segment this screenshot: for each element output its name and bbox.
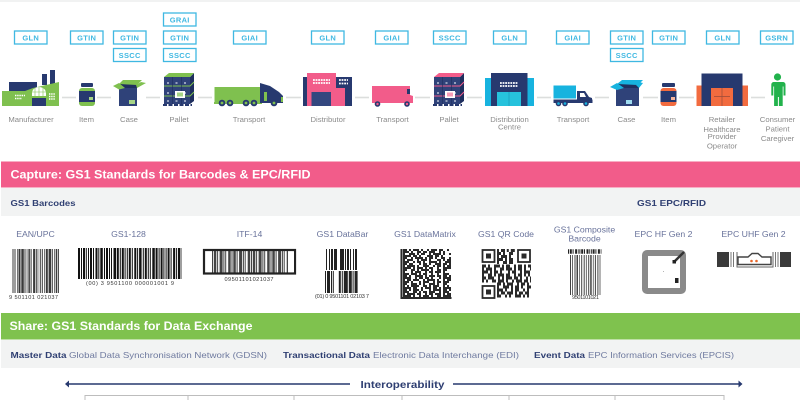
icon: manufacturer factory [2, 70, 59, 106]
identifier tags row: GTIN [617, 34, 636, 42]
icon: case green [113, 80, 146, 106]
icon: EPC UHF RFID tag [717, 252, 791, 267]
stage labels: Item [79, 115, 94, 124]
icon: distribution centre [485, 73, 534, 106]
barcode type labels: GS1-128 [111, 229, 146, 239]
identifier tags row: GIAI [241, 34, 258, 42]
barcode type labels: GS1 DataMatrix [394, 229, 457, 239]
stage labels: Centre [498, 122, 521, 132]
stage labels: Distributor [310, 115, 346, 124]
stage labels: Transport [233, 115, 266, 124]
identifier tags row: GTIN [120, 34, 139, 42]
panel: data standards row [1, 340, 800, 368]
barcode: ITF-14 [204, 250, 295, 283]
barcode: GS1 DataMatrix [402, 249, 452, 299]
icon: consumer person [771, 73, 786, 106]
icon: item jar orange [660, 83, 676, 106]
supply chain connectors [62, 96, 765, 98]
stage labels: Patient [766, 124, 790, 134]
identifier tags row: GRAI [170, 16, 190, 24]
stage labels: Transport [376, 115, 410, 124]
stage labels: Pallet [439, 115, 459, 124]
interoperability arrow [65, 380, 742, 391]
panel: capture heading band: Capture: GS1 Standards for Barcodes & EPC/RFID [10, 168, 311, 182]
icon: pallet pink [433, 73, 464, 105]
icon: pallet green [163, 73, 194, 105]
panel: data standards row: Electronic Data Interchange (EDI) [373, 350, 519, 360]
identifier tags row: GIAI [564, 34, 581, 42]
barcode type labels: GS1 QR Code [478, 229, 534, 239]
identifier tags row: GLN [501, 34, 518, 42]
icon: distributor building [303, 73, 352, 106]
identifier tags row: SSCC [169, 51, 191, 60]
identifier tags row: GTIN [77, 34, 96, 42]
barcode type labels: EPC HF Gen 2 [635, 229, 693, 239]
panel: barcodes and RFID subheading bar [1, 188, 800, 216]
stage labels: Provider [708, 132, 737, 141]
icon: EPC HF RFID tag [645, 252, 684, 291]
stage labels: Case [618, 115, 635, 124]
barcode: GS1-128 [78, 264, 182, 287]
stage labels: Retailer [709, 115, 736, 124]
stage labels: Manufacturer [8, 115, 54, 124]
barcode: GS1 DataBar: (01) 0 9501101 02103 7 [315, 294, 369, 300]
panel: data standards row: Master Data [10, 350, 67, 360]
panel: barcodes and RFID subheading bar: GS1 EPC/RFID [637, 198, 706, 208]
barcode type labels: EPC UHF Gen 2 [721, 229, 786, 239]
barcode: GS1-128: (00) 3 9501100 000001001 9 [86, 281, 174, 287]
stage labels: Distribution [490, 115, 529, 124]
stage labels: Consumer [760, 115, 796, 124]
icon: pink van [372, 86, 413, 107]
icon: item jar green [79, 83, 95, 106]
panel: data standards row: Transactional Data [283, 350, 370, 360]
barcode type labels: ITF-14 [237, 229, 262, 239]
icon: case blue [610, 80, 643, 106]
stage labels: Pallet [169, 115, 189, 124]
identifier tags row: GLN [714, 34, 731, 42]
panel: share heading band [1, 313, 800, 340]
barcode: GS1 Composite: 9501101021 [572, 295, 599, 301]
icon: green truck [214, 83, 283, 106]
panel: barcodes and RFID subheading bar: GS1 Barcodes [10, 198, 76, 208]
stage labels: Caregiver [761, 134, 795, 143]
stage labels: Operator [707, 142, 738, 150]
identifier tags row: SSCC [616, 51, 638, 60]
panel: data standards row: Global Data Synchronisation Network (GDSN) [69, 350, 267, 360]
panel: capture heading band [1, 162, 800, 188]
identifier tags row: GLN [22, 34, 39, 42]
barcode: GS1 Composite [568, 252, 602, 301]
interoperability arrow: Interoperability [360, 380, 445, 391]
barcode type labels: GS1 Composite [554, 224, 615, 234]
barcode: EAN/UPC [9, 271, 60, 301]
identifier tags row: SSCC [119, 51, 141, 60]
stage labels: Transport [557, 115, 590, 124]
icon: retailer building [696, 74, 748, 106]
table top edge [85, 396, 724, 400]
identifier tags row: GLN [319, 34, 336, 42]
barcode: ITF-14: 09501101021037 [224, 277, 274, 283]
identifier tags row: GSRN [765, 34, 788, 42]
stage labels [8, 115, 796, 150]
panel: data standards row: EPC Information Services (EPCIS) [588, 350, 734, 360]
barcode type labels: GS1 DataBar [317, 229, 368, 239]
stage labels: Item [661, 115, 676, 124]
barcode type labels: Barcode [568, 234, 601, 244]
barcode: GS1 QR Code [482, 250, 531, 298]
identifier tags row: SSCC [439, 34, 461, 42]
identifier tags row: GTIN [659, 34, 678, 42]
barcode type labels [16, 224, 786, 244]
identifier tags row: GTIN [170, 34, 189, 42]
panel: share heading band: Share: GS1 Standards for Data Exchange [10, 321, 252, 333]
icon: blue truck [554, 86, 592, 106]
stage labels: Case [120, 115, 138, 124]
barcode: GS1 DataBar [315, 260, 369, 300]
identifier tags row [14, 13, 793, 62]
identifier tags row: GIAI [383, 34, 400, 42]
stage labels: Healthcare [703, 125, 741, 134]
panel: data standards row: Event Data [534, 350, 585, 360]
barcode type labels: EAN/UPC [16, 229, 55, 239]
barcode: EAN/UPC: 9 501101 021037 [9, 295, 58, 301]
